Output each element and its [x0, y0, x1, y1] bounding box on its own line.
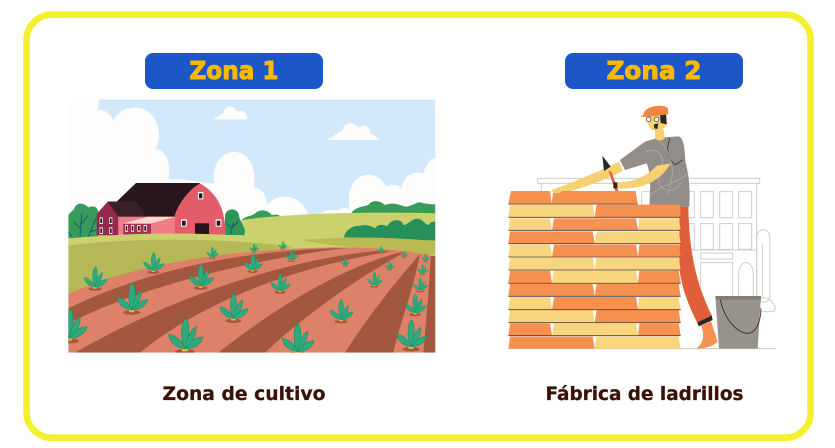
- brick wall: [508, 191, 681, 349]
- caption: Zona de cultivo: Zona de cultivo: [162, 383, 326, 405]
- head and neck: [655, 128, 665, 140]
- badge: Zona 1: [145, 53, 323, 89]
- clouds: [68, 99, 435, 230]
- worker: [552, 106, 718, 348]
- ground line: [508, 347, 776, 350]
- bucket: [715, 296, 761, 349]
- legs: [679, 207, 712, 325]
- tree left of barn: [68, 204, 98, 238]
- plants: [54, 241, 429, 357]
- sky: [97, 100, 436, 256]
- furrows: [68, 248, 435, 353]
- arms: [552, 162, 623, 193]
- badge: Zona 2: [565, 53, 743, 89]
- light green hill: [242, 213, 435, 253]
- distant trees: [242, 210, 280, 220]
- badge: Zona 2: Zona 2: [606, 56, 702, 85]
- badge: Zona 1: Zona 1: [190, 56, 278, 85]
- building outline: [538, 178, 775, 312]
- trowel: [602, 156, 611, 171]
- torso: [620, 136, 690, 207]
- hand on wall: [552, 188, 563, 193]
- caption: Fábrica de ladrillos: Fábrica de ladrillos: [546, 383, 744, 405]
- illustration: brick factory worker: [508, 106, 776, 349]
- illustration: farm landscape: [54, 99, 435, 357]
- front hill: [68, 234, 242, 304]
- hedge: [344, 219, 435, 241]
- tree right of barn: [225, 209, 245, 235]
- field: [68, 247, 435, 353]
- barn: [97, 183, 226, 235]
